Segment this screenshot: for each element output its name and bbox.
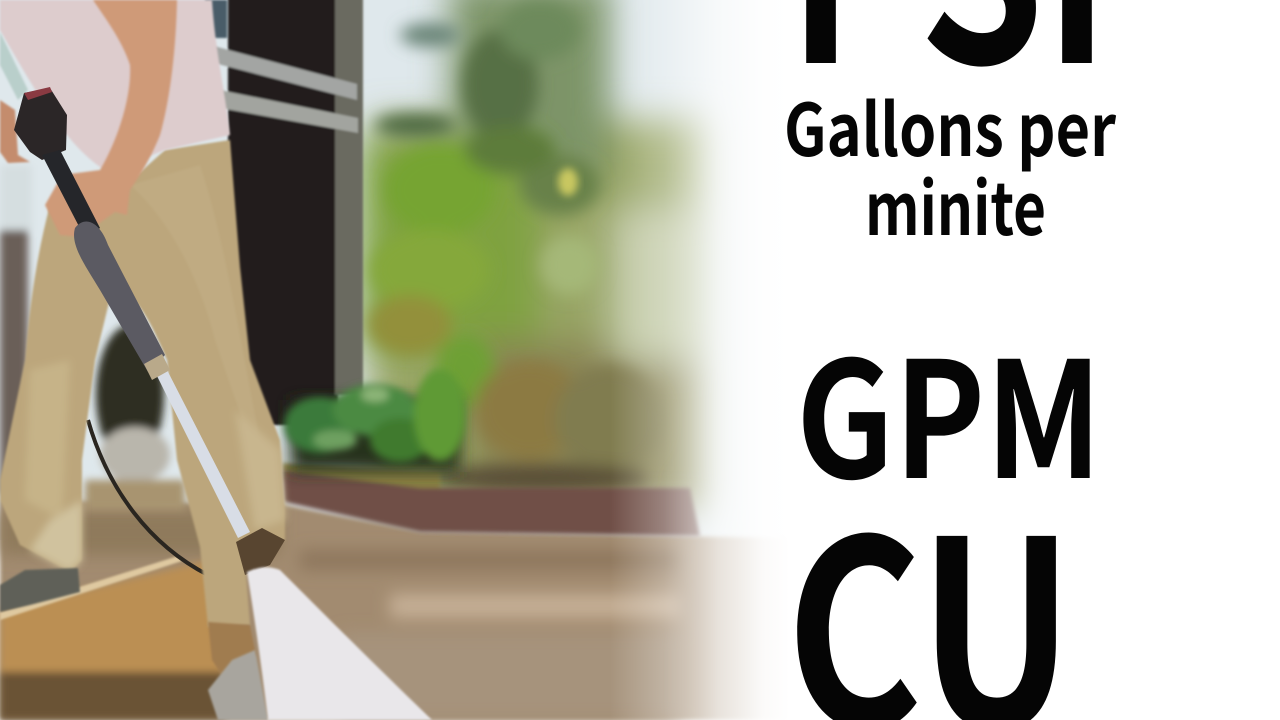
- handle link: [42, 150, 100, 238]
- text: Gallons per minite: minite: [865, 151, 1046, 256]
- red trigger guard: [24, 87, 52, 100]
- photo: person pressure washing a patio: [0, 0, 800, 720]
- background sky: [0, 0, 800, 540]
- foliage behind the legs: [0, 165, 185, 510]
- pressure washer gun and lance: [14, 87, 285, 575]
- shoes: [0, 568, 268, 720]
- hose: [88, 420, 208, 575]
- green leaves: [284, 369, 466, 472]
- arms and hands: [0, 0, 177, 237]
- dark post with rails: [205, 0, 363, 425]
- teal strap: [0, 32, 28, 100]
- paving ground: [0, 500, 790, 720]
- text: Gallons per minite: [784, 72, 1116, 256]
- water spray: [247, 567, 432, 720]
- grey grip: [74, 222, 165, 372]
- khaki trousers: [0, 140, 285, 627]
- sock: [208, 622, 256, 680]
- lance collar: [144, 354, 170, 380]
- person: [0, 0, 285, 720]
- brick garden edge: [282, 463, 700, 536]
- metal lance: [155, 366, 250, 538]
- blurred garden foliage: [360, 0, 710, 510]
- nozzle: [236, 528, 285, 575]
- gun body: [14, 88, 67, 160]
- text: Gallons per minite: Gallons per: [784, 72, 1116, 177]
- white fade over photo: [610, 0, 790, 720]
- heading: GPM: GPM: [796, 292, 1102, 525]
- white shirt: [0, 0, 230, 172]
